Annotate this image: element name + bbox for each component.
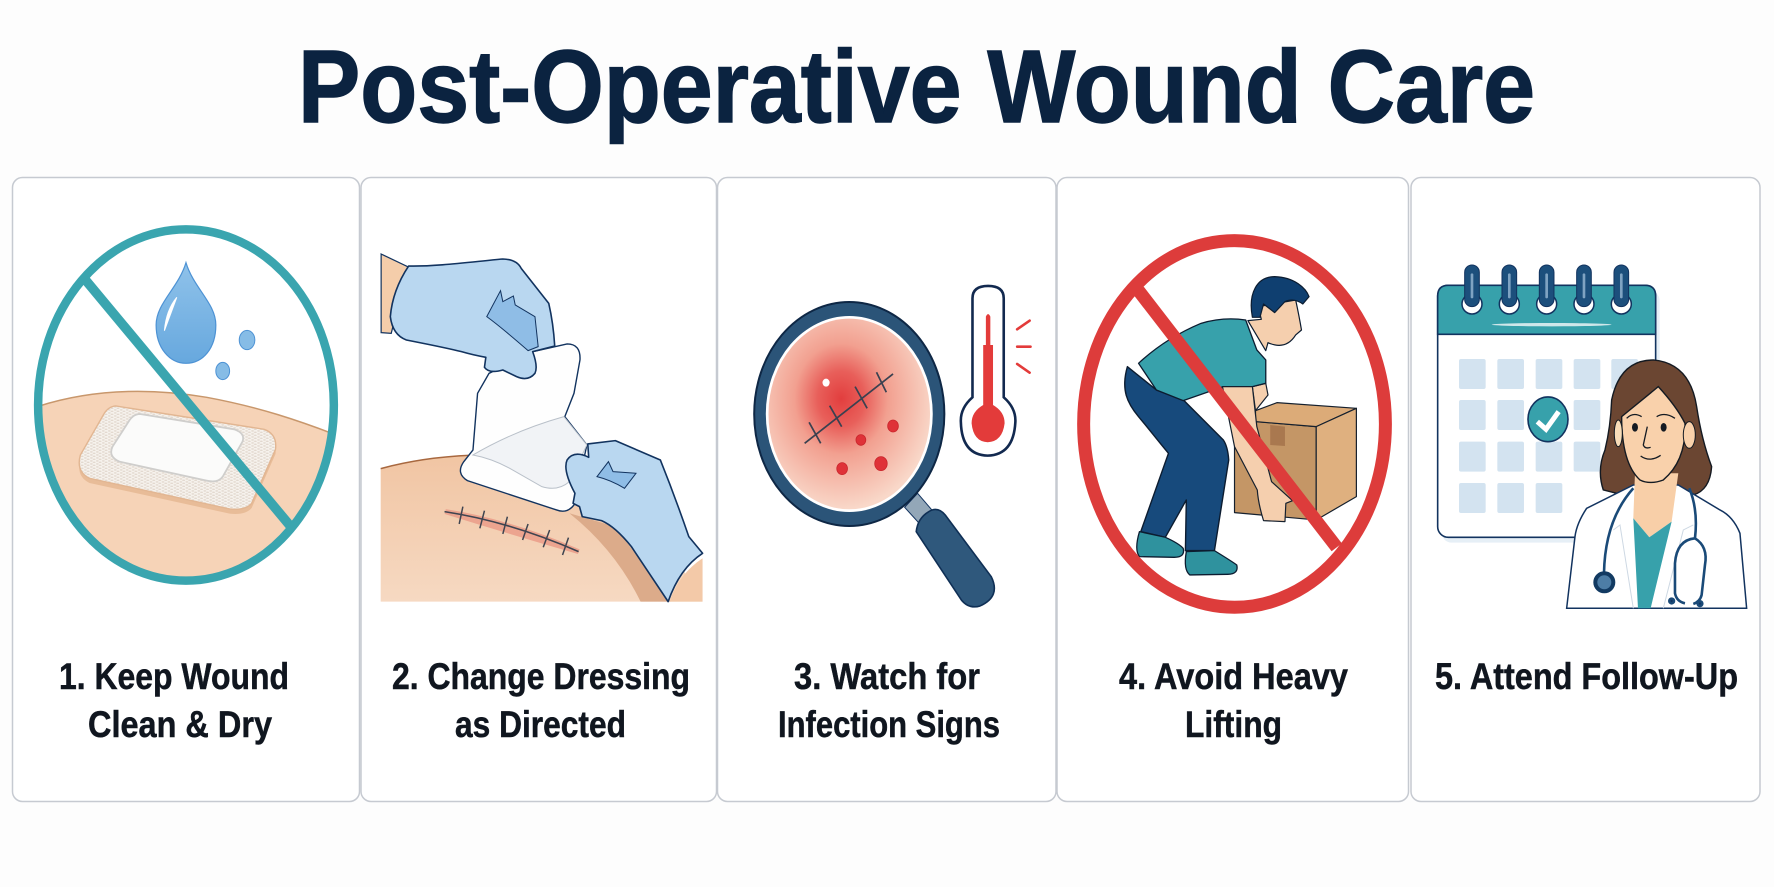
illustration: gloved hands changing dressing [381, 254, 703, 602]
thermometer [961, 286, 1015, 456]
trousers [1125, 367, 1229, 551]
box [1235, 403, 1356, 520]
forearm bottom [670, 558, 703, 602]
prohibition slash [85, 279, 290, 526]
label 3: Infection Signs [778, 704, 1000, 745]
shirt [1139, 319, 1266, 401]
card 2 [361, 178, 716, 802]
label 4: Lifting [1185, 704, 1282, 745]
label 1: Clean & Dry [88, 704, 272, 745]
skin with bandage [42, 390, 328, 576]
shoes [1137, 532, 1237, 575]
illustration: no water on bandage [28, 229, 349, 593]
card 1 [12, 178, 360, 802]
magnifier lens [754, 302, 944, 526]
calendar day grid [1459, 359, 1638, 513]
glove: upper hand [390, 259, 555, 379]
head [1248, 277, 1309, 351]
illustration: no heavy lifting [1084, 241, 1385, 607]
panel: change dressing [361, 178, 716, 802]
label 3: 3. Watch for [794, 656, 980, 697]
icon: small drop [239, 330, 255, 350]
card 5 [1411, 178, 1760, 802]
prohibition ring [38, 229, 334, 581]
prohibition ring [1084, 241, 1385, 607]
label 4: 4. Avoid Heavy [1119, 656, 1348, 697]
prohibition slash [1139, 291, 1337, 547]
stethoscope [1595, 488, 1706, 606]
binding rings [1462, 265, 1631, 314]
drop highlight [164, 297, 177, 331]
label 2 [392, 656, 690, 745]
check badge [1528, 397, 1568, 442]
doctor [1567, 360, 1747, 608]
far arm [1252, 383, 1268, 411]
dressing [460, 344, 587, 511]
panel: attend follow-up [1411, 178, 1760, 802]
panel: watch for infection [718, 178, 1056, 802]
illustration: magnifier and thermometer [754, 286, 1031, 607]
pustules [837, 420, 898, 475]
glove: lower hand [566, 441, 703, 602]
forearm top [381, 254, 408, 333]
inflamed stitches [805, 372, 893, 443]
card 4 [1057, 178, 1408, 802]
magnifier handle [905, 493, 994, 607]
label 2: 2. Change Dressing [392, 656, 690, 697]
title: Post-Operative Wound Care [298, 29, 1535, 144]
label 2: as Directed [455, 704, 626, 745]
label 1 [59, 656, 289, 745]
skin and incision [381, 455, 703, 602]
icon: tiny drop [216, 362, 230, 380]
card 3 [718, 178, 1056, 802]
label 3 [778, 656, 1000, 745]
illustration: calendar and doctor [1438, 265, 1747, 608]
icon: large water drop [156, 263, 216, 363]
panel: keep wound clean and dry [12, 178, 360, 802]
calendar [1438, 265, 1660, 543]
heat rays [1017, 321, 1031, 373]
highlight spot [822, 379, 830, 387]
label 4 [1119, 656, 1348, 745]
label 5: 5. Attend Follow-Up [1435, 656, 1738, 697]
label 1: 1. Keep Wound [59, 656, 289, 697]
near arm [1222, 387, 1293, 522]
panel: avoid heavy lifting [1057, 178, 1408, 802]
